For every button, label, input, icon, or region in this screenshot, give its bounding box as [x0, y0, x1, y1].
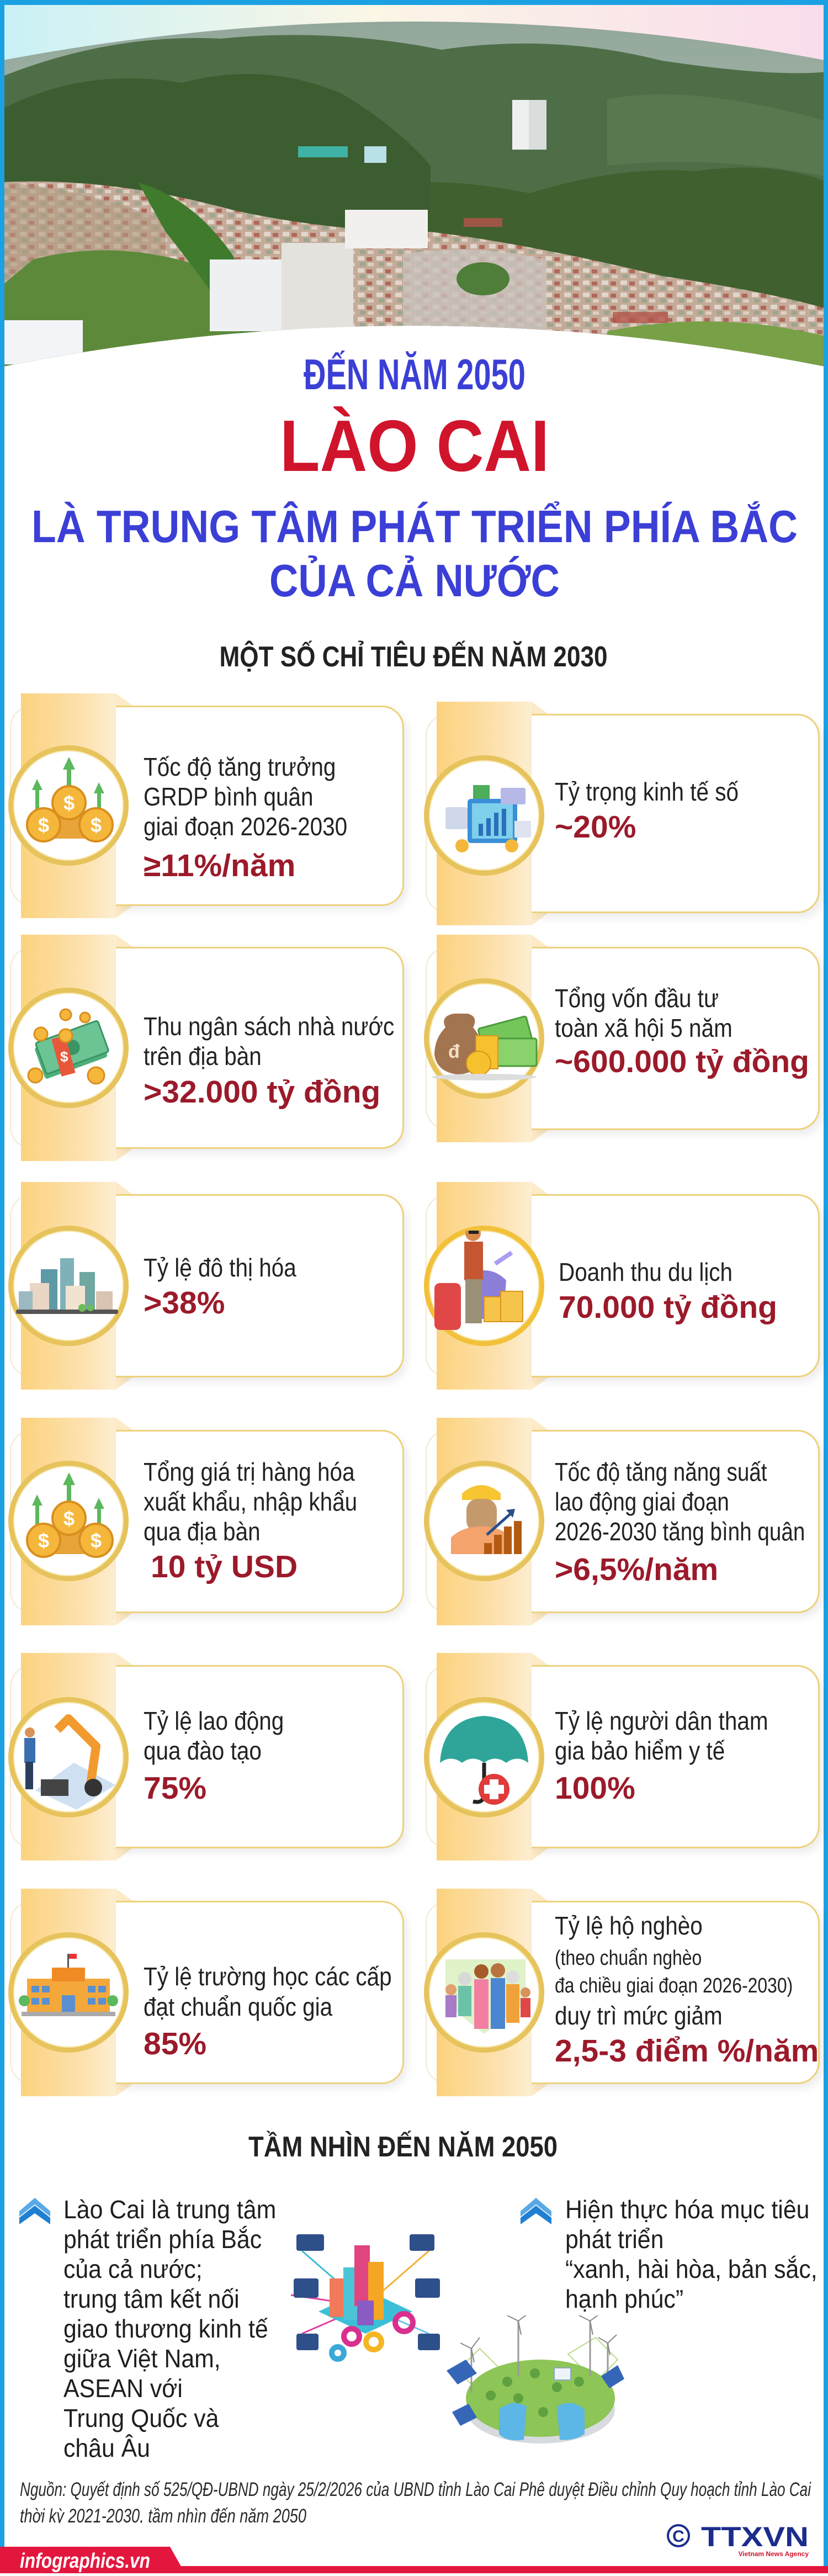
icon: coins with arrows — [8, 1461, 129, 1581]
text: criteria: đa chiều giai đoạn 2026-2030) — [555, 1974, 793, 1997]
icon: money stack — [8, 988, 129, 1108]
icon: money bag and bills — [424, 978, 544, 1099]
icon: umbrella with cross — [424, 1697, 544, 1817]
card: tourism revenue — [424, 1182, 824, 1390]
card: poverty rate — [424, 1889, 824, 2096]
text: criteria — [555, 1947, 793, 1997]
footer bar: infographics.vn — [0, 2547, 828, 2573]
text: Tỷ lệ trường học các cấp — [144, 1962, 392, 1991]
subtitle: by 2050: ĐẾN NĂM 2050 — [304, 350, 526, 399]
icon: coins with arrows: $ — [91, 1529, 102, 1552]
value: 100% — [555, 1771, 635, 1806]
text — [144, 1706, 284, 1765]
text: GRDP bình quân — [144, 782, 314, 811]
text — [144, 1457, 357, 1546]
text: Tốc độ tăng năng suất — [555, 1457, 767, 1486]
main title: LÀO CAI — [280, 405, 549, 486]
vision text left: trung tâm kết nối — [63, 2285, 240, 2313]
text: Tỷ lệ lao động — [144, 1706, 284, 1735]
icon: money bag and bills: đ — [448, 1041, 460, 1062]
card: health insurance — [424, 1653, 824, 1861]
value: >32.000 tỷ đồng — [144, 1074, 380, 1110]
icon: coins with arrows — [8, 745, 129, 866]
icon: family — [424, 1932, 544, 2053]
icon: coins with arrows: $ — [38, 1529, 49, 1552]
vision text left: ASEAN với — [63, 2374, 183, 2403]
logo: TTXVN: Vietnam News Agency — [739, 2550, 809, 2558]
icon: right chevron — [521, 2198, 551, 2224]
vision text left — [63, 2195, 276, 2462]
card: import export value — [8, 1418, 408, 1625]
vision text left: giữa Việt Nam, — [63, 2344, 221, 2373]
title block — [31, 350, 798, 673]
card: labor productivity — [424, 1418, 824, 1625]
text: lao động giai đoạn — [555, 1487, 729, 1516]
header photo: Lao Cai city — [4, 0, 824, 367]
heading: vision 2050: TẦM NHÌN ĐẾN NĂM 2050 — [248, 2130, 558, 2163]
text: đạt chuẩn quốc gia — [144, 1992, 332, 2021]
text: xuất khẩu, nhập khẩu — [144, 1487, 357, 1516]
vision text right: hạnh phúc” — [565, 2285, 683, 2313]
section heading 2030: MỘT SỐ CHỈ TIÊU ĐẾN NĂM 2030 — [220, 640, 607, 673]
text: Thu ngân sách nhà nước — [144, 1012, 394, 1041]
value: ~600.000 tỷ đồng — [555, 1044, 809, 1079]
vision text left: giao thương kinh tế — [63, 2314, 268, 2343]
icon: buildings — [8, 1226, 129, 1346]
text: Tổng vốn đầu tư — [555, 984, 719, 1013]
text — [144, 1962, 392, 2021]
value: >6,5%/năm — [555, 1552, 718, 1587]
text — [144, 752, 347, 841]
value: ~20% — [555, 809, 636, 845]
icon: left chevron — [19, 2198, 50, 2224]
card: urbanization — [8, 1182, 408, 1390]
text — [555, 1457, 805, 1546]
icon: coins with arrows: $ — [91, 814, 102, 836]
card: national standard schools — [8, 1889, 408, 2096]
text: Tốc độ tăng trưởng — [144, 752, 336, 781]
vision text left: châu Âu — [63, 2434, 150, 2462]
vision text right: Hiện thực hóa mục tiêu — [565, 2195, 809, 2224]
icon: worker with chart — [424, 1461, 544, 1581]
icon: traveler — [424, 1226, 544, 1346]
text: qua đào tạo — [144, 1736, 262, 1765]
text: Tỷ trọng kinh tế số — [555, 777, 739, 806]
icon: money stack: $ — [60, 1048, 68, 1065]
card: trained labor — [8, 1653, 408, 1861]
icon: school — [8, 1932, 129, 2053]
logo: TTXVN: C — [672, 2527, 684, 2546]
text: gia bảo hiểm y tế — [555, 1736, 725, 1765]
text: Doanh thu du lịch — [559, 1258, 733, 1286]
value: >38% — [144, 1285, 225, 1321]
value: 75% — [144, 1771, 206, 1806]
icon: dashboard — [424, 755, 544, 876]
value: 85% — [144, 2026, 206, 2061]
value: 10 tỷ USD — [151, 1549, 298, 1584]
text: toàn xã hội 5 năm — [555, 1014, 733, 1042]
text — [144, 1012, 394, 1070]
title line 2: CỦA CẢ NƯỚC — [269, 554, 560, 606]
icon: coins with arrows: $ — [38, 814, 49, 836]
vision text left: của cả nước; — [63, 2255, 203, 2283]
illustration: green eco city — [447, 2315, 624, 2444]
card: total investment — [424, 935, 824, 1142]
vision text right — [565, 2195, 818, 2313]
footer bar: infographics.vn: infographics.vn — [20, 2550, 150, 2573]
text: qua địa bàn — [144, 1517, 261, 1546]
side borders — [0, 0, 4, 2573]
text — [555, 1706, 768, 1765]
icon: robot arm — [8, 1697, 129, 1817]
text: duy trì mức giảm — [555, 2001, 723, 2030]
text: Tỷ lệ người dân tham — [555, 1706, 768, 1735]
value: ≥11%/năm — [144, 848, 295, 883]
card: GRDP growth — [8, 693, 408, 918]
text: giai đoạn 2026-2030 — [144, 812, 347, 841]
vision text left: phát triển phía Bắc — [63, 2225, 262, 2254]
source note — [20, 2479, 811, 2523]
text: Tỷ lệ hộ nghèo — [555, 1911, 703, 1940]
card: digital economy — [424, 702, 824, 925]
illustration: smart city data hub — [290, 2234, 440, 2362]
text: 2026-2030 tăng bình quân — [555, 1517, 805, 1546]
logo: TTXVN: TTXVN — [701, 2522, 809, 2552]
vision text left: Lào Cai là trung tâm — [63, 2195, 276, 2224]
icon: coins with arrows: $ — [63, 792, 75, 814]
text: criteria: (theo chuẩn nghèo — [555, 1947, 702, 1970]
vision text right: phát triển — [565, 2225, 664, 2254]
text: Tổng giá trị hàng hóa — [144, 1457, 355, 1486]
text: trên địa bàn — [144, 1042, 262, 1070]
logo: TTXVN — [667, 2522, 809, 2558]
vision text right: “xanh, hài hòa, bản sắc, — [565, 2255, 818, 2283]
value: 70.000 tỷ đồng — [559, 1290, 777, 1325]
text — [555, 984, 733, 1042]
vision text left: Trung Quốc và — [63, 2404, 219, 2432]
card: state budget revenue — [8, 935, 408, 1161]
value: 2,5-3 điểm %/năm — [555, 2033, 819, 2069]
icon: coins with arrows: $ — [63, 1507, 75, 1530]
text: Tỷ lệ đô thị hóa — [144, 1253, 296, 1282]
